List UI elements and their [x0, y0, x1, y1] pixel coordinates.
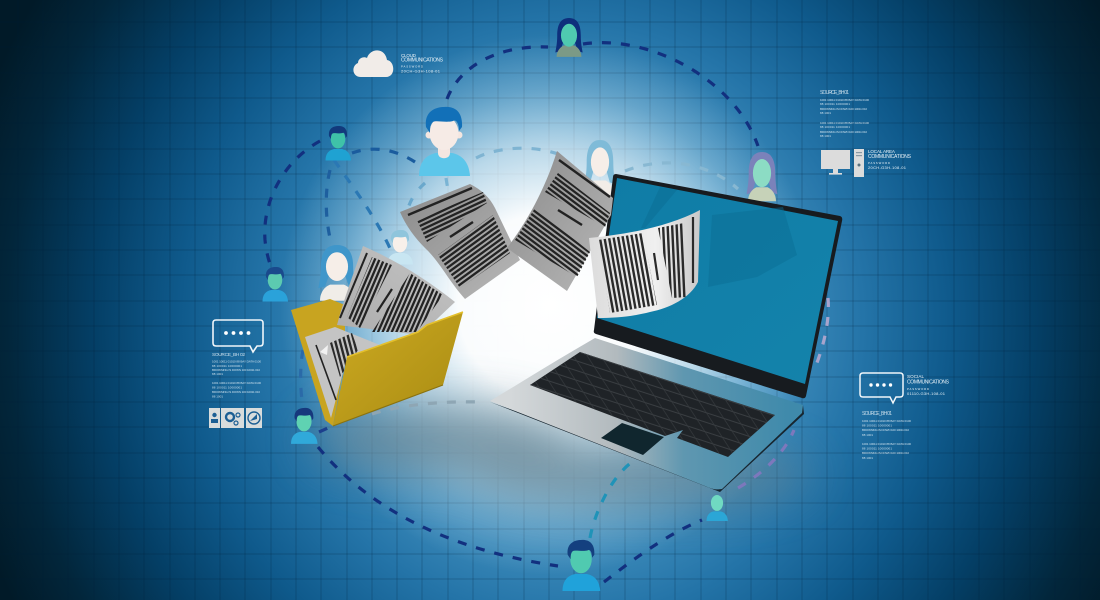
right source text block: 1001 10011 01010 88 BAY DATA 0100 [820, 121, 869, 125]
left source text block: 88 1001 [212, 394, 223, 398]
icon tiles: user, gears, globe [209, 408, 262, 428]
person: man at bottom [562, 540, 600, 591]
right source text block: 1001 10011 01010 88 BAY DATA 0100 [820, 98, 869, 102]
folder back panel [291, 299, 345, 426]
social communications label: COMMUNICATIONS [907, 380, 950, 386]
social communications label: PASSWORD [907, 387, 929, 391]
laptop screen bezel [594, 174, 842, 398]
icon: chat bubble right [860, 373, 903, 403]
cloud communications label: PASSWORD [401, 64, 423, 68]
left source text block: 1001 10011 01010 88 BAY DATA 0100 [212, 360, 261, 364]
cloud communications label: 20CH-G3H-108-01 [401, 68, 441, 74]
cloud communications label: CLOUD [401, 53, 417, 58]
right source text block: 88 100011 10000001 [820, 125, 850, 129]
person: woman above folder [318, 245, 356, 301]
bottom right source text block: 88 100011 10000001 [862, 424, 892, 428]
person: top woman [555, 18, 583, 57]
left source text block: SOURCE_BH 02 [212, 352, 245, 358]
screen reflections [641, 187, 797, 287]
person: large man [419, 107, 470, 176]
keyboard [530, 352, 775, 457]
icon: desktop computer [821, 149, 864, 177]
local area communications label: COMMUNICATIONS [868, 154, 912, 160]
local area communications label: LOCAL AREA [868, 149, 896, 154]
document emerging from screen [588, 210, 700, 318]
bottom right source text block: BROWSING IS DOWN 100 10011 010 [862, 451, 909, 455]
person: man under laptop [706, 495, 728, 521]
left source text block: 88 100011 10000001 [212, 386, 242, 390]
person: pale small man [388, 230, 413, 264]
bottom right source text block [862, 411, 911, 460]
floor shadow [310, 406, 810, 505]
icon: chat bubble left [213, 320, 263, 352]
left source text block [212, 352, 261, 398]
local area communications label: 20CH-G3H-108-01 [868, 165, 907, 170]
dashed network connections [265, 43, 828, 582]
document entering folder [337, 246, 455, 335]
bottom right source text block: BROWSING IS DOWN 100 10011 010 [862, 428, 909, 432]
right source text block: 88 100011 10000001 [820, 102, 850, 106]
laptop [490, 174, 842, 492]
laptop base underside [490, 402, 804, 492]
left source text block: BROWSING IS DOWN 100 10011 010 [212, 390, 260, 394]
bottom right source text block: 88 1001 [862, 433, 873, 437]
flying document left [400, 184, 520, 299]
bottom right source text block: 1001 10011 01010 88 BAY DATA 0100 [862, 419, 911, 423]
folder front panel [333, 312, 463, 426]
person: small man upper left [326, 126, 351, 160]
social communications label [907, 374, 950, 396]
local area communications label [868, 149, 912, 170]
person: lilac woman [747, 152, 777, 201]
left source text block: 1001 10011 01010 88 BAY DATA 0100 [212, 381, 261, 385]
person: pale woman behind papers [585, 140, 615, 195]
cloud communications label: COMMUNICATIONS [401, 58, 444, 64]
local area communications label: PASSWORD [868, 161, 890, 165]
document inside folder [305, 327, 380, 418]
right source text block: BROWSING IS DOWN 100 10011 010 [820, 107, 867, 111]
flying document right [507, 151, 613, 291]
left source text block: 88 100011 10000001 [212, 364, 242, 368]
bottom right source text block: SOURCE_BH 01 [862, 411, 892, 417]
right source text block: 88 1001 [820, 111, 831, 115]
right source text block: 88 1001 [820, 134, 831, 138]
person: man below folder [291, 408, 318, 444]
bottom right source text block: 88 1001 [862, 456, 873, 460]
icon: cloud [353, 50, 393, 77]
left source text block: BROWSING IS DOWN 100 10011 010 [212, 368, 260, 372]
social communications label: SOCIAL [907, 374, 924, 379]
social communications label: 01110-G3H-108-01 [907, 391, 946, 396]
laptop display [597, 178, 838, 384]
person: small man far left [262, 267, 288, 302]
touchpad [601, 423, 664, 455]
bottom right source text block: 1001 10011 01010 88 BAY DATA 0100 [862, 442, 911, 446]
right source text block: SOURCE_BH 01 [820, 90, 849, 96]
bottom right source text block: 88 100011 10000001 [862, 446, 892, 450]
laptop base [490, 338, 803, 489]
left source text block: 88 1001 [212, 372, 223, 376]
right source text block: BROWSING IS DOWN 100 10011 010 [820, 130, 867, 134]
cloud communications label [401, 53, 444, 74]
right source text block [820, 90, 869, 138]
